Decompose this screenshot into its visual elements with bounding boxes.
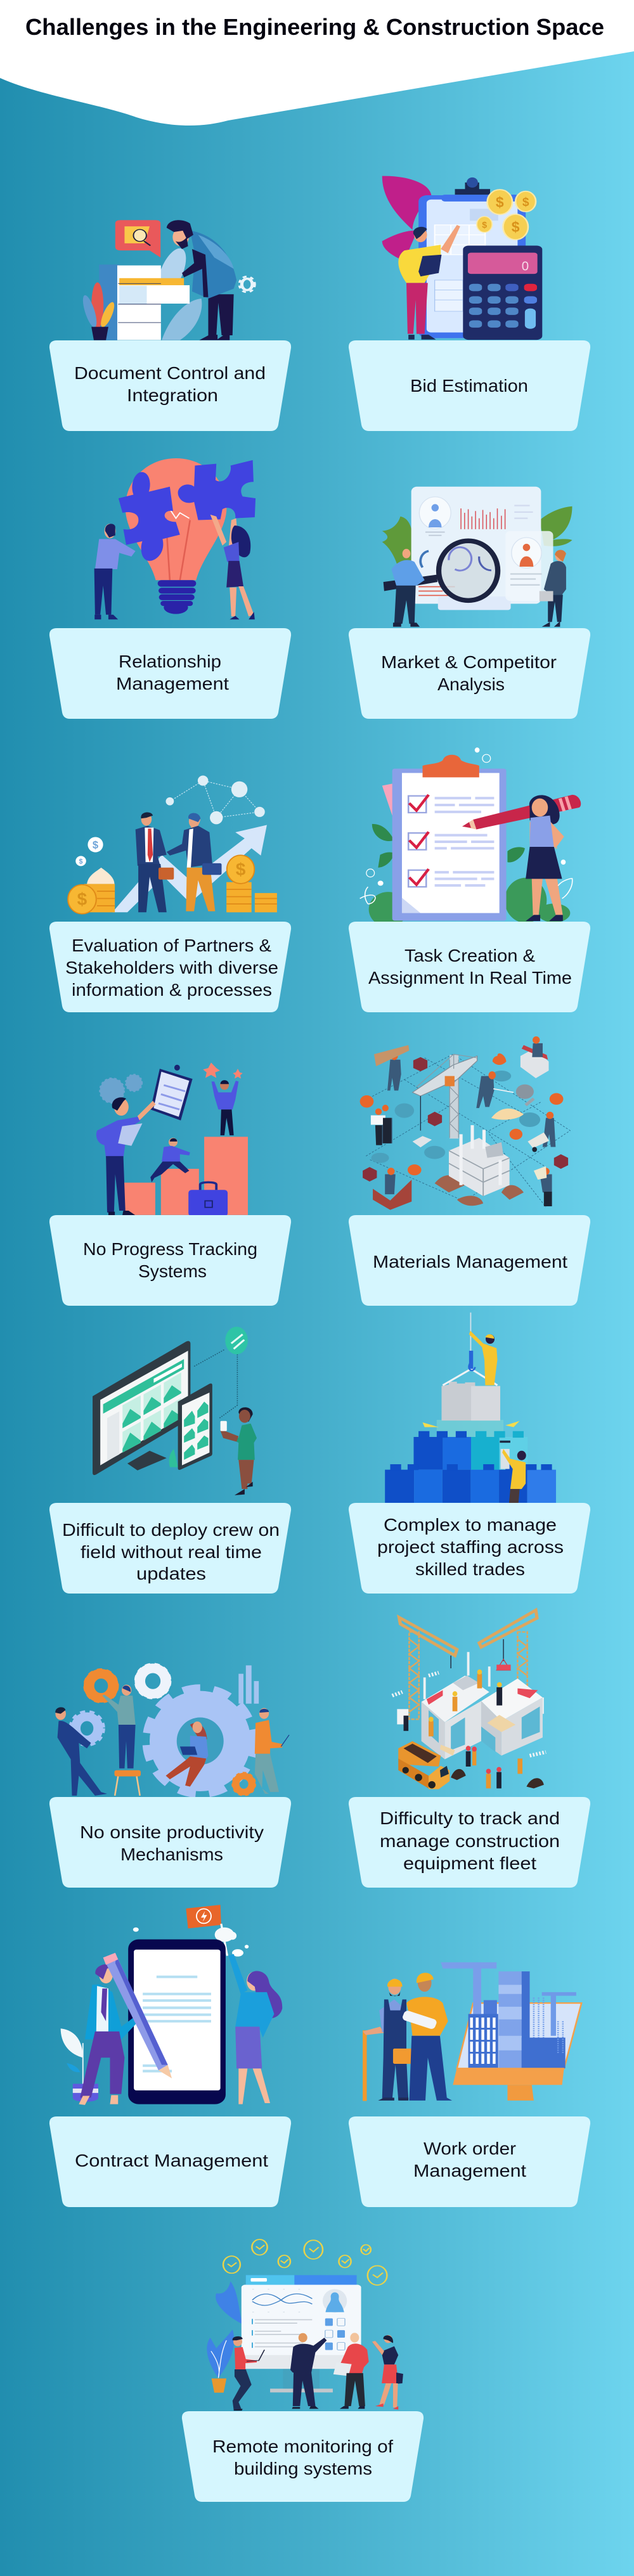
panel: equipment fleet: equipment fleet: [403, 1853, 536, 1873]
illustration: equipment fleet: [392, 1610, 546, 1789]
panel: market and competitor analysis: Analysis: [437, 674, 505, 694]
illustration: bid estimation: [382, 176, 542, 340]
panel: bid estimation: Bid Estimation: [410, 376, 528, 396]
panel: relationship management: Relationship: [119, 652, 221, 671]
panel: deploy crew: [49, 1503, 291, 1594]
illustration: relationship management: [94, 458, 256, 619]
panel: market and competitor analysis: Market & Competitor: [381, 652, 557, 672]
illustration: evaluation of partners: $: [93, 839, 98, 851]
illustration: deploy crew: [93, 1327, 257, 1495]
illustration: market and competitor analysis: [382, 487, 572, 627]
illustration: bid estimation: $: [482, 219, 487, 229]
panel: remote monitoring: building systems: [234, 2459, 372, 2478]
panel: remote monitoring: Remote monitoring of: [212, 2437, 393, 2456]
illustration: remote monitoring: [207, 2239, 403, 2411]
panel: project staffing: project staffing across: [377, 1537, 564, 1557]
panel: productivity mechanisms: Mechanisms: [120, 1845, 223, 1864]
panel: productivity mechanisms: [49, 1797, 291, 1888]
panel: work order management: Management: [413, 2161, 526, 2180]
panel: contract management: [49, 2116, 291, 2207]
panel: project staffing: [349, 1503, 590, 1594]
panel: bid estimation: [349, 340, 590, 431]
illustration: evaluation of partners: $: [236, 860, 246, 879]
illustration: bid estimation: 0: [522, 259, 529, 273]
panel: deploy crew: updates: [136, 1564, 206, 1583]
illustration: productivity mechanisms: [55, 1664, 289, 1796]
illustration: evaluation of partners: $: [79, 858, 83, 865]
panel: work order management: [349, 2116, 590, 2207]
panel: document control: Document Control and: [74, 363, 266, 383]
panel: materials management: [349, 1215, 590, 1306]
panel: market and competitor analysis: [349, 628, 590, 719]
panel: no progress tracking: Systems: [138, 1261, 207, 1281]
panel: remote monitoring: [182, 2411, 424, 2502]
illustration: task creation: [360, 747, 581, 927]
panel: equipment fleet: [349, 1797, 590, 1888]
panel: evaluation of partners: Evaluation of Partners &: [72, 936, 271, 955]
panel: work order management: Work order: [424, 2139, 516, 2158]
panel: task creation: Task Creation &: [404, 946, 535, 965]
panel: document control: [49, 340, 291, 431]
illustration: evaluation of partners: [68, 775, 277, 914]
illustration: materials management: [360, 1036, 570, 1210]
illustration: no progress tracking: [96, 1062, 248, 1216]
panel: relationship management: [49, 628, 291, 719]
panel: relationship management: Management: [116, 674, 229, 693]
panel: evaluation of partners: [49, 922, 291, 1012]
white wave header: [0, 0, 634, 126]
panel: deploy crew: Difficult to deploy crew on: [62, 1520, 280, 1540]
panel: evaluation of partners: information & processes: [72, 980, 272, 1000]
panel: productivity mechanisms: No onsite productivity: [80, 1822, 264, 1842]
panel: task creation: Assignment In Real Time: [368, 968, 572, 988]
title: Challenges in the Engineering & Construction Space: [25, 14, 604, 40]
illustration: contract management: [61, 1905, 282, 2105]
panel: project staffing: skilled trades: [415, 1559, 525, 1579]
panel: no progress tracking: [49, 1215, 291, 1306]
illustration: bid estimation: $: [496, 194, 504, 210]
illustration: evaluation of partners: $: [77, 889, 87, 909]
panel: contract management: Contract Management: [75, 2151, 268, 2170]
illustration: work order management: [363, 1962, 581, 2101]
panel: document control: Integration: [127, 385, 218, 405]
panel: no progress tracking: No Progress Tracking: [83, 1239, 257, 1259]
panel: project staffing: Complex to manage: [384, 1515, 557, 1535]
illustration: bid estimation: $: [522, 196, 529, 209]
panel: deploy crew: field without real time: [81, 1542, 262, 1562]
illustration: project staffing: [385, 1313, 556, 1511]
panel: task creation: [349, 922, 590, 1012]
illustration: bid estimation: $: [512, 219, 520, 235]
panel: equipment fleet: Difficulty to track and: [380, 1808, 560, 1828]
illustration: document control: [80, 220, 255, 340]
panel: equipment fleet: manage construction: [380, 1831, 560, 1851]
panel: materials management: Materials Management: [373, 1252, 567, 1272]
panel: evaluation of partners: Stakeholders with diverse: [65, 958, 278, 977]
